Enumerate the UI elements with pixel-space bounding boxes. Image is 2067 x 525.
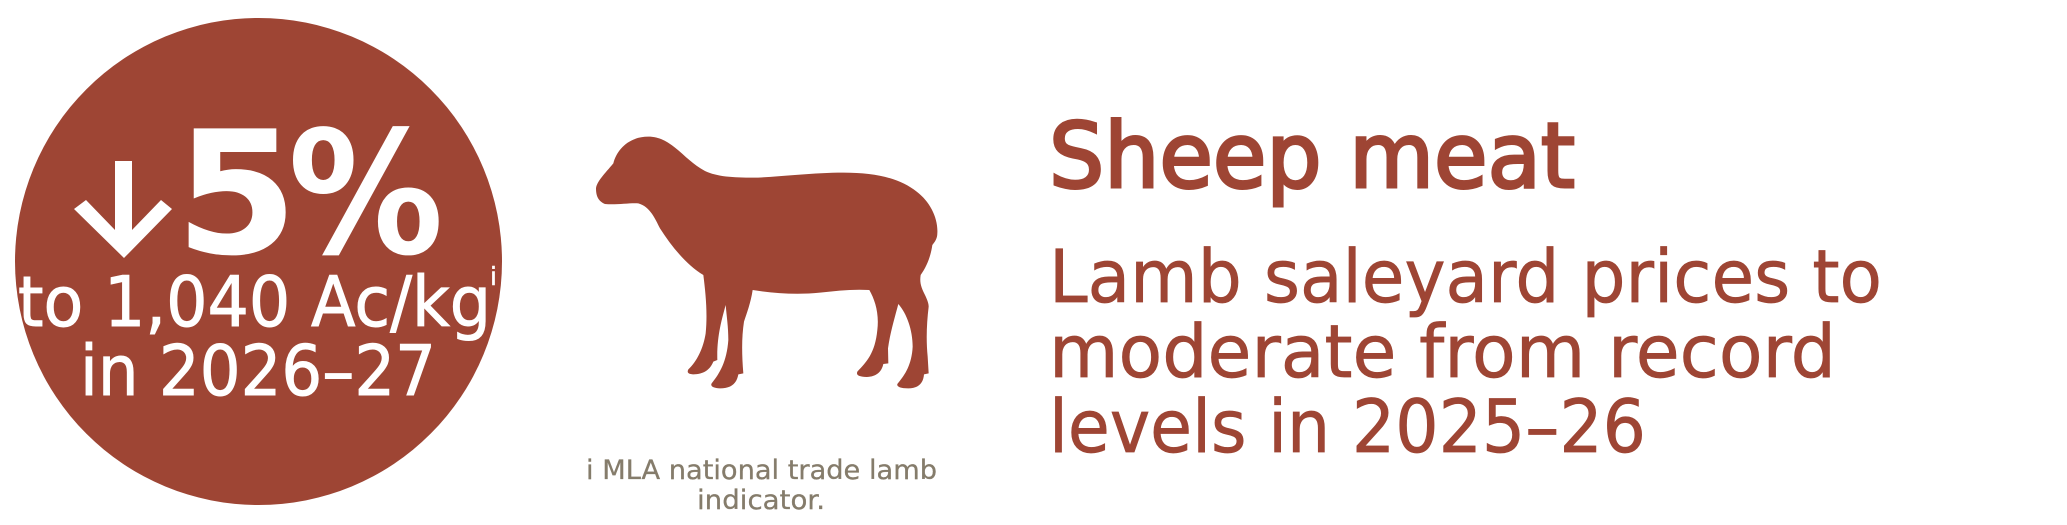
- description text: [1049, 235, 1882, 470]
- icon: sheep silhouette: [596, 137, 937, 388]
- heading: Sheep meat: [1049, 104, 1575, 209]
- period text: in 2026–27: [80, 331, 436, 412]
- footnote text: [586, 455, 937, 516]
- description text: levels in 2025–26: [1049, 385, 1646, 470]
- footnote marker: i: [490, 262, 497, 291]
- big number: 5: 5: [175, 95, 298, 294]
- percent sign: %: [288, 95, 444, 294]
- footnote text: indicator.: [697, 485, 825, 516]
- price text: to 1,040 Ac/kg: [18, 262, 491, 343]
- footnote text: i MLA national trade lamb: [586, 455, 937, 486]
- description text: Lamb saleyard prices to: [1049, 235, 1882, 320]
- description text: moderate from record: [1049, 310, 1836, 395]
- panel: price forecast circle: [15, 18, 502, 505]
- icon: down arrow: [74, 161, 172, 258]
